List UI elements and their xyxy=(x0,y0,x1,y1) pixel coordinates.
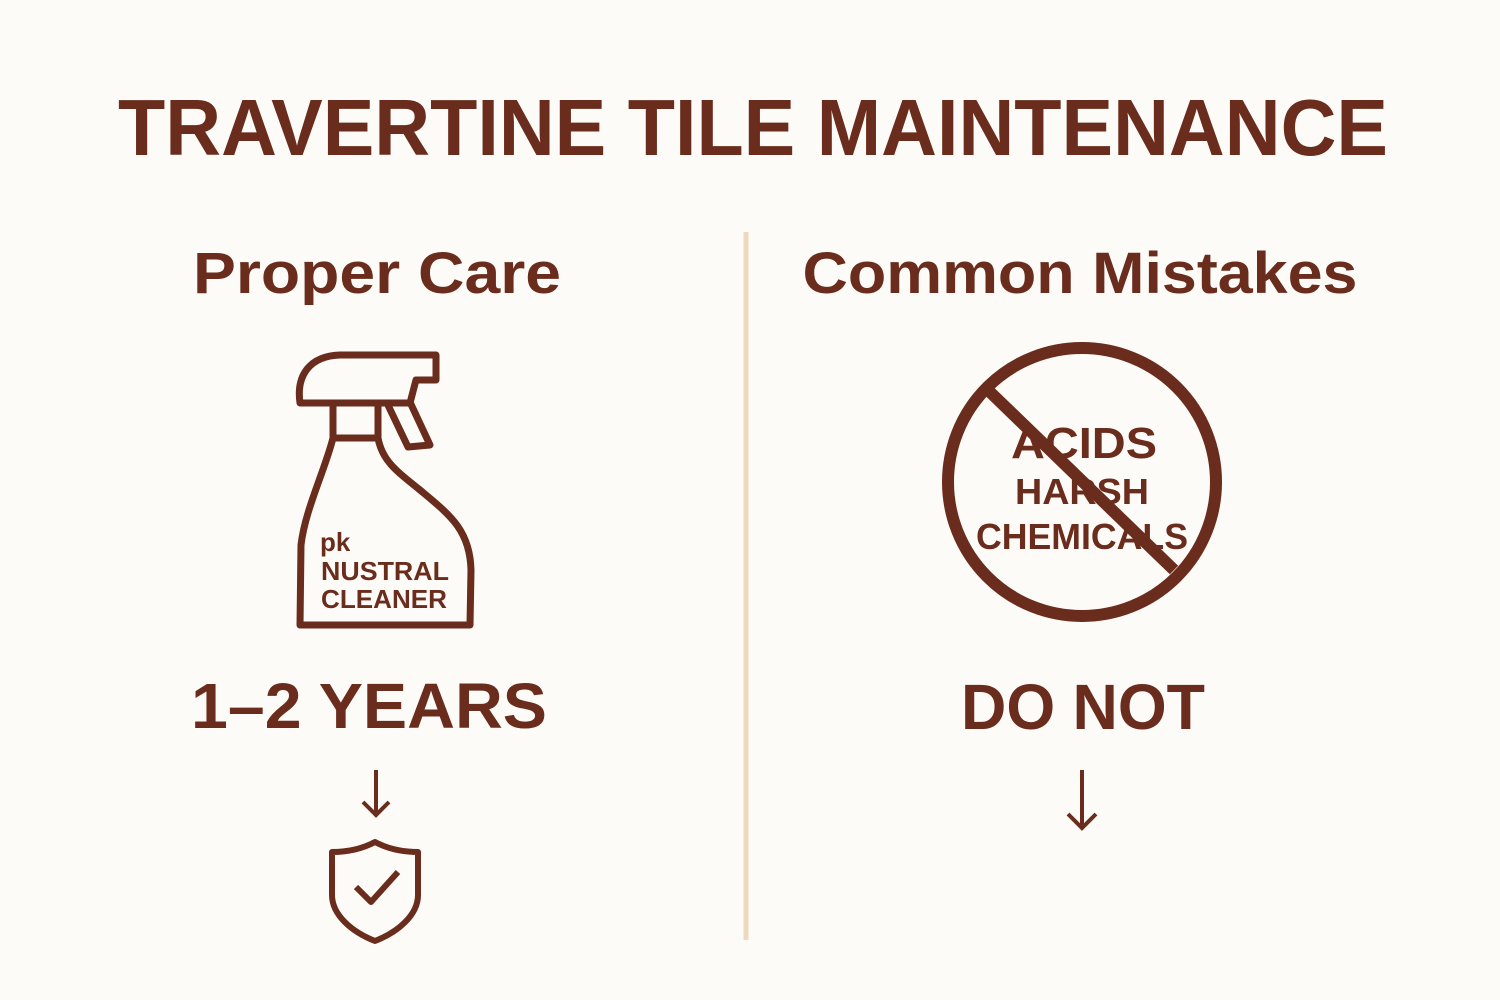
text: 1-2 years: 1–2 YEARS xyxy=(191,670,547,742)
icon: spray bottle: CLEANER xyxy=(321,584,447,614)
label: cleaner: pk xyxy=(320,527,351,557)
panel: common mistakes xyxy=(802,241,1358,828)
icon: shield xyxy=(332,842,418,941)
icon: spray bottle: NUSTRAL xyxy=(321,556,449,586)
arrow xyxy=(363,770,389,815)
panel: proper care xyxy=(191,241,561,941)
heading: proper care: Proper Care xyxy=(193,241,561,306)
icon: prohibited acids: HARSH xyxy=(1015,471,1149,512)
arrow xyxy=(1068,770,1096,828)
icon: prohibited acids xyxy=(948,348,1216,616)
icon: prohibited acids: CHEMICALS xyxy=(976,516,1188,557)
heading: common mistakes: Common Mistakes xyxy=(802,241,1358,306)
icon: spray bottle xyxy=(299,355,471,625)
title: TRAVERTINE TILE MAINTENANCE xyxy=(118,83,1388,172)
icon: prohibited acids: ACIDS xyxy=(1011,419,1157,468)
text: do not: DO NOT xyxy=(961,671,1205,743)
